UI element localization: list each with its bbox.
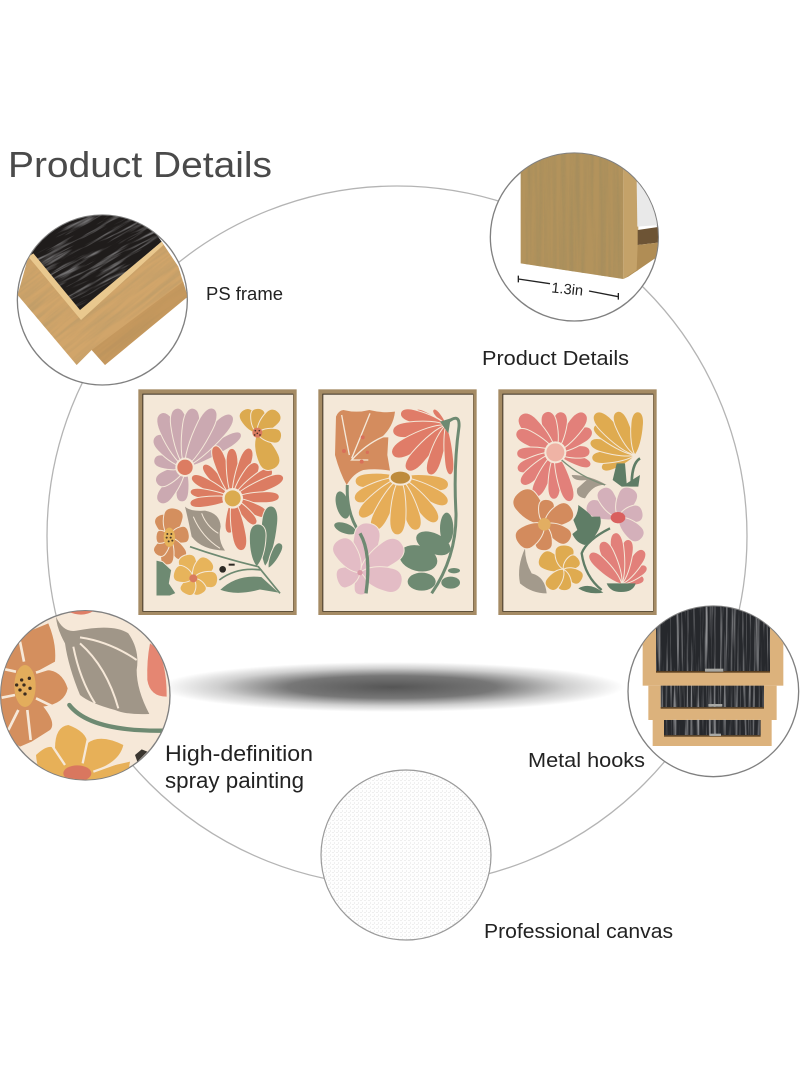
lilac flower — [149, 405, 244, 507]
title: Product Details — [8, 144, 272, 185]
gold flower — [535, 544, 585, 593]
detail: PS frame corner — [16, 214, 188, 386]
label: PS frame: PS frame — [206, 284, 283, 304]
lower gold flower — [171, 552, 218, 598]
detail: high-definition print — [0, 610, 170, 781]
black leaf fragment — [135, 749, 147, 762]
small green plant and grey sprig — [613, 463, 640, 487]
pink flower — [329, 521, 409, 595]
light wood frame — [18, 242, 188, 365]
green stem — [69, 705, 163, 731]
detail: metal hooks on stacked frames — [628, 602, 799, 777]
front frame — [653, 720, 772, 746]
label: professional canvas: Professional canvas — [484, 921, 673, 943]
orange flower — [151, 506, 191, 566]
coral fan flower — [388, 406, 455, 477]
subheading: product details: Product Details — [482, 348, 629, 370]
painting 3: coral sunburst and fans — [498, 389, 657, 615]
floor shadow — [160, 662, 624, 712]
lilac flower — [584, 484, 647, 545]
dark wood panel — [30, 210, 162, 312]
orange flower — [508, 484, 577, 552]
detail: frame depth 1.3in — [490, 152, 660, 321]
orange tulip — [335, 410, 395, 485]
grey leaf close-up — [56, 617, 149, 714]
label: metal hooks: Metal hooks — [528, 750, 645, 772]
grey leaf — [519, 548, 547, 593]
coral sunburst flower — [513, 408, 595, 503]
top right gold flower — [237, 406, 284, 474]
coral petals — [147, 643, 167, 697]
green stems and leaves — [347, 418, 459, 593]
painting 2: gold daisy and tulip — [318, 389, 477, 615]
central green plant — [572, 505, 601, 545]
gold flower close-up — [36, 725, 130, 780]
detail: frame depth 1.3in: 1.3in — [551, 280, 584, 300]
large connecting ring — [47, 186, 747, 886]
orange flower close-up — [0, 623, 68, 747]
infographic canvas — [0, 151, 800, 941]
gold daisy — [352, 470, 451, 535]
label: high-definition spray painting: High-definition — [165, 741, 313, 766]
green leaves and stems — [156, 505, 285, 596]
gold fan — [588, 408, 644, 473]
coral flower — [189, 444, 286, 552]
painting 1: coral and lilac flowers — [138, 389, 297, 615]
middle frame — [648, 686, 777, 720]
label: high-definition spray painting — [165, 741, 313, 793]
grey leaf — [185, 507, 225, 551]
detail: professional canvas — [321, 770, 491, 940]
back frame — [643, 628, 783, 686]
label: high-definition spray painting: spray painting — [165, 768, 304, 793]
coral fan — [586, 532, 649, 588]
dimension marker — [518, 276, 618, 300]
wood side face — [521, 152, 623, 279]
